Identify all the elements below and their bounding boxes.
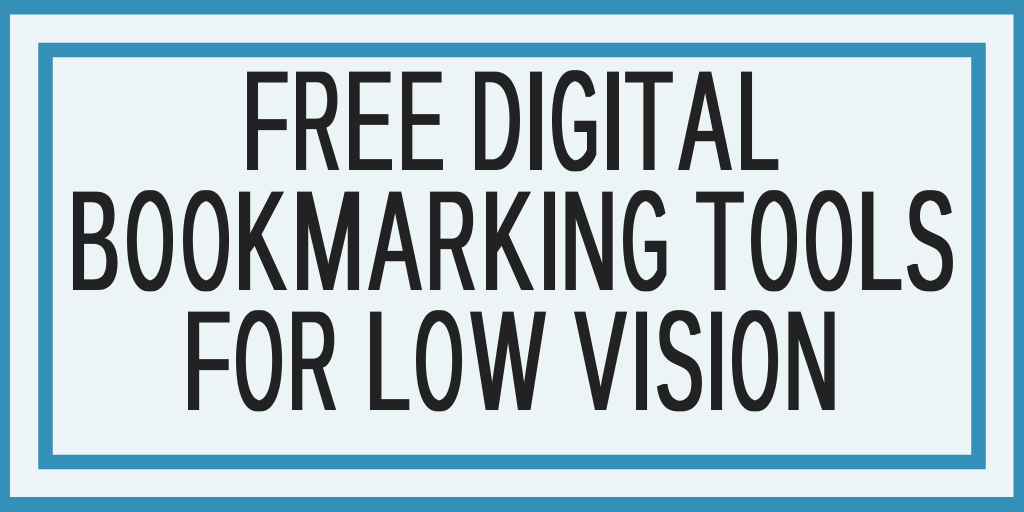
title text: O [415, 282, 463, 441]
title text: L [737, 42, 779, 201]
title text: S [906, 162, 954, 321]
title text: O [126, 162, 174, 321]
title text: I [601, 42, 625, 201]
title text: E [398, 42, 444, 201]
title text: R [288, 282, 337, 441]
title text: D [471, 42, 521, 201]
title text: I [631, 282, 652, 441]
title text: V [576, 282, 626, 441]
title text: S [656, 282, 703, 441]
title text: G [551, 42, 599, 201]
title text: N [561, 162, 617, 321]
title text: L [857, 162, 902, 321]
title text: F [184, 282, 231, 441]
title text: A [680, 42, 731, 201]
title text: I [706, 282, 727, 441]
title text [69, 42, 954, 441]
title text: O [731, 282, 779, 441]
title text: I [524, 42, 548, 201]
title text: W [472, 282, 544, 441]
title text: K [482, 162, 533, 321]
title text: M [292, 162, 364, 321]
title text: O [750, 162, 798, 321]
title text: N [784, 282, 839, 441]
title text: F [243, 42, 289, 201]
title text: G [622, 162, 669, 321]
title text: B [69, 162, 120, 321]
title text: L [365, 282, 410, 441]
title text: I [539, 162, 560, 321]
title text: A [370, 162, 421, 321]
title text: R [293, 42, 340, 201]
title text: O [805, 162, 853, 321]
title text: O [235, 282, 283, 441]
title text: T [625, 42, 673, 201]
title text: O [182, 162, 230, 321]
title text: T [696, 162, 744, 321]
title text: R [426, 162, 476, 321]
title text: K [235, 162, 286, 321]
inner frame [46, 50, 978, 462]
title text: E [345, 42, 393, 201]
